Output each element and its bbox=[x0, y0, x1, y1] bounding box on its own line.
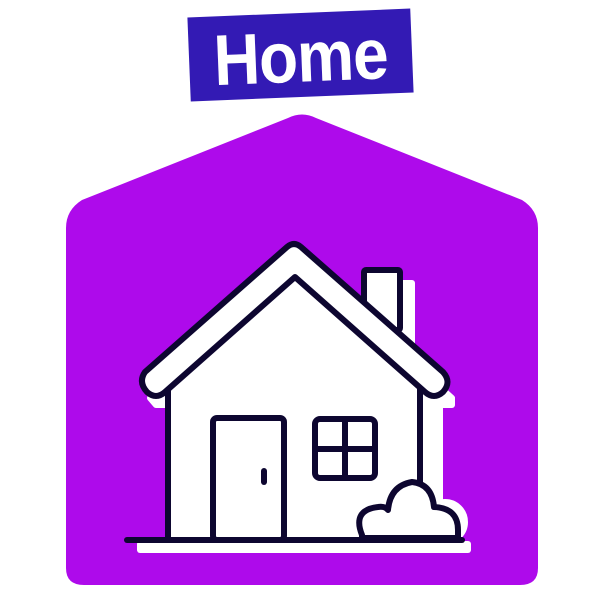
bush bbox=[359, 482, 458, 538]
chimney bbox=[364, 270, 400, 330]
roof bbox=[142, 244, 448, 396]
window bbox=[315, 419, 375, 478]
door bbox=[213, 418, 284, 540]
walls bbox=[168, 275, 420, 540]
ground bbox=[127, 537, 462, 543]
white shadow bbox=[140, 260, 468, 550]
title banner: Home bbox=[212, 13, 389, 101]
